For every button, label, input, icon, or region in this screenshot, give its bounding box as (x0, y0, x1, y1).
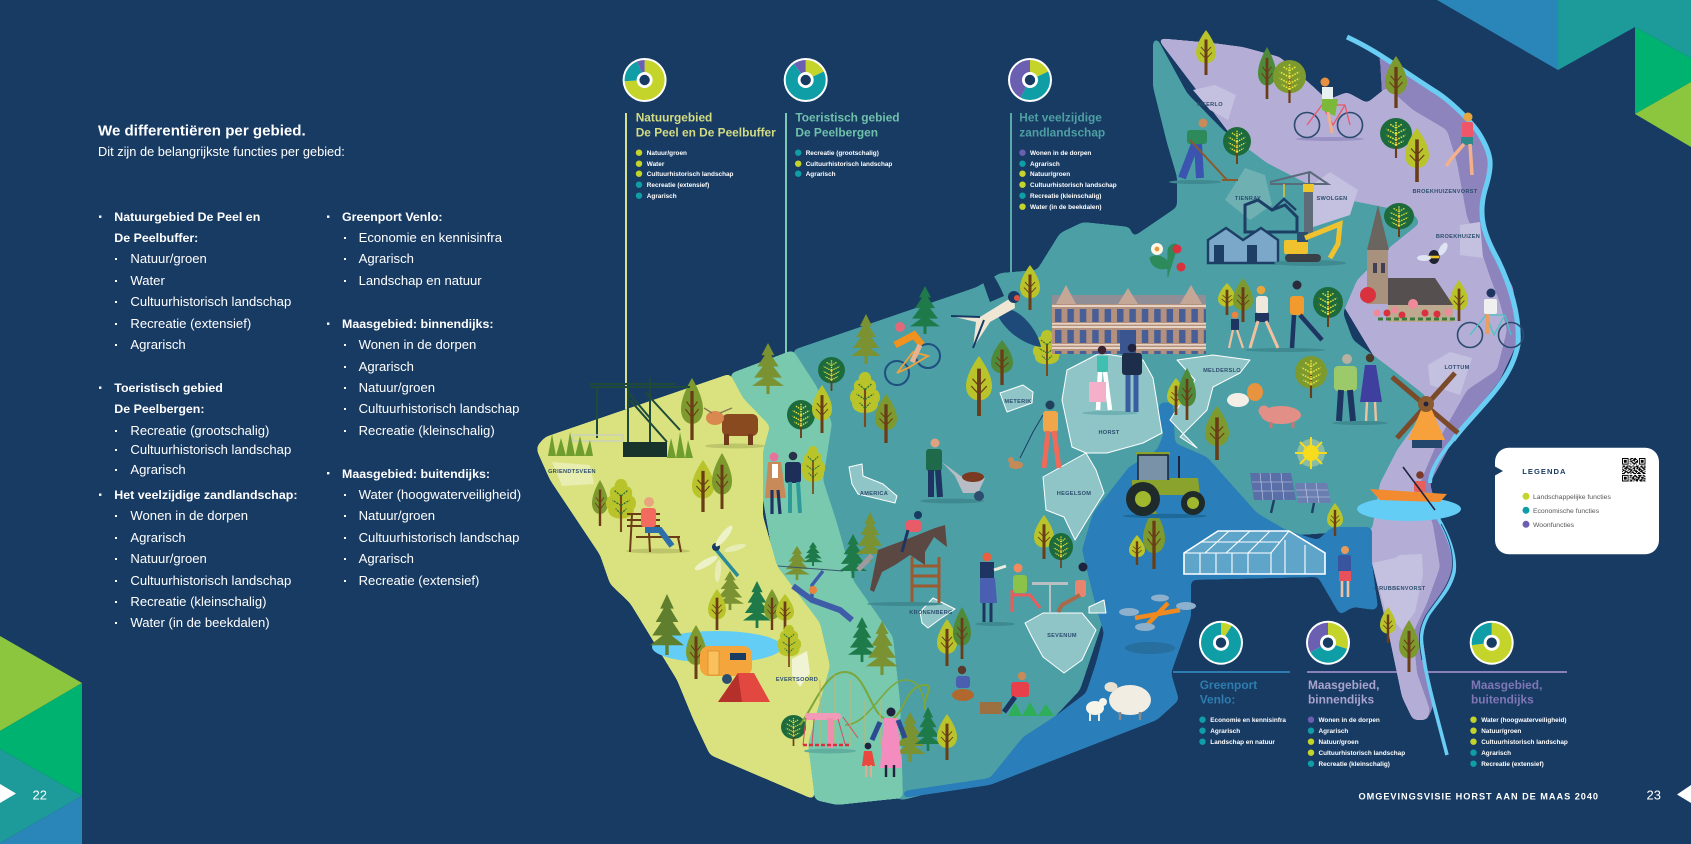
leader line: De Peelbergen (785, 113, 787, 353)
lake (652, 631, 782, 663)
text block: function list column 1: Recreatie (kleinschalig) (130, 594, 266, 609)
village: Hegelsom (1043, 453, 1104, 540)
village: Broekhuizen (1460, 222, 1483, 258)
river Maas (1347, 37, 1518, 755)
village: Tienray (1225, 168, 1272, 220)
icon: windmill (1392, 373, 1458, 448)
map labels: AMERICA (860, 491, 888, 497)
icon: swallow (951, 253, 1041, 348)
text block: function list column 1: Agrarisch (130, 462, 186, 477)
icon: gardeners with crate (952, 666, 1054, 716)
region: teal sand landscape (793, 38, 1427, 800)
icon: strawberry flower (1150, 243, 1186, 277)
donut chart (784, 58, 828, 102)
region: light teal Peelbergen (730, 350, 903, 805)
icon: racing cyclist (885, 322, 940, 385)
map labels: HORST (1098, 430, 1120, 436)
footer right with page number (1358, 785, 1691, 803)
region: dark lilac floodplain (1347, 37, 1520, 720)
icon: sheep and lamb (1086, 682, 1151, 721)
panel: Maasgebied buitendijks: buitendijks (1471, 692, 1534, 706)
village: Swolgen (1305, 172, 1358, 228)
text block: function list column 2: Greenport Venlo: (342, 210, 443, 224)
map: village shapes (849, 353, 1250, 673)
map labels: LOTTUM (1444, 365, 1470, 371)
map labels: METERIK (1004, 399, 1032, 405)
text block: function list column 1: Cultuurhistorisch landschap (130, 573, 291, 588)
panel: Maasgebied binnendijks: binnendijks (1308, 692, 1374, 706)
text block: function list column 2: Agrarisch (359, 359, 414, 374)
map: landscape regions (537, 37, 1520, 805)
text block: function list column 2: Agrarisch (359, 251, 414, 266)
text block: function list column 1: Agrarisch (130, 337, 186, 352)
map labels: HEGELSOM (1057, 491, 1091, 497)
icon: family walking (1229, 280, 1325, 352)
panel: legend card: Landschappelijke functies (1533, 494, 1611, 501)
text block: function list column 1: Cultuurhistorisch landschap (130, 442, 291, 457)
text block: function list column 2 (327, 210, 521, 588)
intro heading: Dit zijn de belangrijkste functies per gebied: (98, 144, 345, 159)
text block: function list column 1: Agrarisch (130, 530, 186, 545)
village: Meerlo (1193, 85, 1236, 120)
leader line: Greenport (1173, 671, 1290, 673)
icon: zipline rider (778, 566, 852, 620)
trees: north and east (1020, 30, 1468, 672)
donut chart (623, 58, 667, 102)
panel: Het veelzijdige zandlandschap: Recreatie (kleinschalig) (1030, 193, 1101, 200)
text block: function list column 1: Recreatie (extensief) (130, 316, 251, 331)
panel: Maasgebied buitendijks: Recreatie (extensief) (1481, 761, 1544, 768)
panel: Greenport Venlo: Economie en kennisinfra (1210, 717, 1286, 724)
icon: woman on bicycle (1294, 78, 1364, 141)
panel: Natuurgebied De Peel (623, 58, 776, 200)
text block: function list column 2: Agrarisch (359, 551, 414, 566)
map labels: TIENRAY (1235, 196, 1261, 202)
panel: legend card: LEGENDA (1522, 467, 1566, 476)
map labels: MEERLO (1197, 102, 1223, 108)
intro heading (98, 122, 345, 159)
icon: waiter and terrace (975, 552, 1088, 626)
village: Lottum (1428, 352, 1472, 395)
panel: Het veelzijdige zandlandschap: Cultuurhistorisch landschap (1030, 182, 1117, 189)
village: small hamlet (1089, 600, 1106, 613)
village: Horst (1062, 353, 1162, 453)
icon: historic building (1052, 285, 1206, 354)
donut chart (1306, 621, 1350, 665)
icon: caravan and tent (700, 646, 770, 702)
panel: Het veelzijdige zandlandschap (1008, 58, 1117, 211)
page number left: 22 (32, 788, 47, 802)
panel: Maasgebied binnendijks: Agrarisch (1318, 728, 1348, 735)
region: yellow-green Peel (537, 374, 830, 800)
text block: function list column 1: Toeristisch gebied (114, 381, 223, 395)
icon: new houses (1208, 199, 1297, 263)
donut chart (1470, 621, 1514, 665)
panel: Maasgebied buitendijks: Maasgebied, (1471, 678, 1542, 692)
icon: runner (1446, 112, 1473, 175)
icon: elderly couple (1332, 354, 1388, 425)
panel: Toeristisch gebied (784, 58, 900, 178)
panel: Maasgebied binnendijks: Natuur/groen (1318, 739, 1359, 746)
village: Grubbenvorst (1372, 554, 1423, 630)
panel: legend card (1495, 448, 1659, 554)
icon: crane (1270, 172, 1328, 233)
icon: kid with ice cream (1338, 546, 1351, 597)
text block: function list column 2: Maasgebied: binnendijks: (342, 317, 493, 331)
village: Kronenberg (920, 598, 955, 628)
trees: Peel and Peelbergen (592, 286, 1013, 762)
map labels: SWOLGEN (1316, 196, 1348, 202)
icon: chickens and pig (1227, 383, 1301, 428)
icon: QR code (1622, 458, 1646, 482)
panel: Greenport Venlo (1199, 621, 1286, 746)
map: pale villages on lilac (552, 85, 1483, 687)
icon: solar panels (1250, 473, 1331, 513)
text block: function list column 1: De Peelbuffer: (114, 231, 198, 245)
panel: Het veelzijdige zandlandschap: Het veelzijdige (1019, 110, 1102, 124)
panel: Natuurgebied De Peel: Natuur/groen (647, 150, 687, 157)
text block: function list column 2: Cultuurhistorisch landschap (359, 401, 519, 416)
text block: function list column 1: De Peelbergen: (114, 402, 205, 416)
map labels: BROEKHUIZEN (1436, 234, 1480, 240)
text block: function list column 2: Cultuurhistorisch landschap (359, 530, 519, 545)
leader line: zandlandschap (1010, 113, 1012, 281)
panel: Greenport Venlo: Agrarisch (1210, 728, 1240, 735)
text block: function list column 1: Water (in de beekdalen) (130, 615, 270, 630)
icon: gardener with wheelbarrow (920, 438, 985, 503)
map labels: GRUBBENVORST (1374, 586, 1426, 592)
intro heading: We differentiëren per gebied. (98, 122, 306, 140)
text block: function list column 1: Natuur/groen (130, 251, 207, 266)
map labels: KRONENBERG (909, 610, 953, 616)
text block: function list column 2: Landschap en natuur (359, 273, 482, 288)
icon: roller coaster and swing ride (800, 672, 929, 754)
text block: function list column 1: Cultuurhistorisch landschap (130, 294, 291, 309)
panel: Greenport Venlo: Venlo: (1200, 692, 1235, 706)
panel: Natuurgebied De Peel: Cultuurhistorisch landschap (647, 171, 734, 178)
text block: function list column 1: Recreatie (grootschalig) (130, 423, 269, 438)
panel: Natuurgebied De Peel: Agrarisch (647, 193, 677, 200)
text block: function list column 2: Water (hoogwaterveiligheid) (359, 487, 521, 502)
panel: legend card: Woonfuncties (1533, 522, 1575, 529)
panel: Maasgebied binnendijks: Wonen in de dorpen (1318, 717, 1380, 724)
panel: Toeristisch gebied: Toeristisch gebied (795, 110, 900, 124)
icon: shopping couple (1082, 344, 1142, 415)
panel: Het veelzijdige zandlandschap: Water (in de beekdalen) (1030, 204, 1102, 211)
icon: man on bicycle (1458, 288, 1524, 348)
panel: Natuurgebied De Peel: De Peel en De Peelbuffer (636, 126, 776, 140)
icon: dragonfly (693, 524, 746, 582)
map labels: GRIENDTSVEEN (548, 469, 596, 475)
map labels: SEVENUM (1047, 633, 1077, 639)
icon: couple with phone (765, 452, 801, 514)
footer right with page number: OMGEVINGSVISIE HORST AAN DE MAAS 2040 (1358, 792, 1599, 802)
panel: Maasgebied binnendijks: Maasgebied, (1308, 678, 1379, 692)
leader line: Maasgebied (1307, 671, 1567, 673)
village: Sevenum (1025, 613, 1096, 673)
icon: drone (1119, 594, 1196, 654)
icon: kayaker (1357, 467, 1461, 521)
panel: Toeristisch gebied: Cultuurhistorisch landschap (806, 161, 892, 168)
map labels (548, 102, 1480, 683)
icon: sun (1295, 437, 1327, 469)
icon: church with roses (1360, 205, 1455, 322)
panel: Toeristisch gebied: Agrarisch (806, 171, 836, 178)
leader line: De Peel (625, 113, 627, 409)
icon: mother and child (862, 708, 905, 777)
icon: excavator (1274, 224, 1346, 266)
text block: function list column 1: Natuurgebied De Peel en (114, 210, 260, 224)
text block: function list column 1: Het veelzijdige zandlandschap: (114, 488, 297, 502)
village: Evertsoord (792, 651, 810, 687)
donut chart (1199, 621, 1243, 665)
village: Griendtsveen (552, 462, 594, 486)
panel: legend card: Economische functies (1533, 508, 1600, 515)
donut chart (1008, 58, 1052, 102)
text block: function list column 2: Recreatie (kleinschalig) (359, 423, 495, 438)
map labels: BROEKHUIZENVORST (1412, 189, 1478, 195)
panel: Toeristisch gebied: Recreatie (grootschalig) (806, 150, 879, 157)
panel: Maasgebied buitendijks: Agrarisch (1481, 750, 1511, 757)
panel: Het veelzijdige zandlandschap: Natuur/groen (1030, 171, 1070, 178)
village: Meterik (1000, 385, 1033, 412)
icon: greenhouse (1184, 531, 1325, 574)
panel: Maasgebied buitendijks: Water (hoogwaterveiligheid) (1481, 717, 1567, 724)
panel: Maasgebied binnendijks: Cultuurhistorisch landschap (1318, 750, 1405, 757)
icon: farmer with rake (1169, 118, 1238, 184)
region: blue greenport water (903, 402, 1378, 798)
panel: Natuurgebied De Peel: Water (647, 161, 665, 168)
panel: Toeristisch gebied: De Peelbergen (795, 126, 878, 140)
panel: Maasgebied buitendijks: Cultuurhistorisch landschap (1481, 739, 1568, 746)
text block: function list column 2: Economie en kennisinfra (359, 230, 503, 245)
text block: function list column 1 (99, 210, 297, 630)
panel: Het veelzijdige zandlandschap: zandlandschap (1019, 126, 1105, 140)
panel: Natuurgebied De Peel: Recreatie (extensief) (647, 182, 709, 189)
icon: bumblebee (1417, 241, 1450, 264)
panel: Maasgebied binnendijks: Recreatie (kleinschalig) (1318, 761, 1390, 768)
text block: function list column 1: Natuur/groen (130, 551, 207, 566)
icon: Highland cow (704, 408, 765, 448)
text block: function list column 2: Wonen in de dorpen (359, 337, 476, 352)
panel: Natuurgebied De Peel: Natuurgebied (636, 110, 712, 124)
village: Melderslo (1170, 355, 1250, 448)
panel: Het veelzijdige zandlandschap: Agrarisch (1030, 161, 1060, 168)
village: America (849, 464, 897, 503)
icon: person on bench (626, 497, 690, 554)
panel: Het veelzijdige zandlandschap: Wonen in de dorpen (1030, 150, 1091, 157)
footer right with page number: 23 (1646, 788, 1661, 802)
text block: function list column 2: Recreatie (extensief) (359, 573, 479, 588)
map labels: EVERTSOORD (776, 677, 818, 683)
map labels: MELDERSLO (1203, 368, 1241, 374)
icon: horse rider and jump (858, 511, 947, 606)
icon: lift bridge (548, 378, 693, 458)
text block: function list column 2: Natuur/groen (359, 508, 435, 523)
panel: Maasgebied binnendijks (1306, 621, 1405, 768)
page number left (0, 784, 47, 803)
icon: man walking dog (1008, 400, 1059, 469)
corner decoration: bottom left triangles (0, 636, 82, 844)
panel: Greenport Venlo: Landschap en natuur (1210, 739, 1275, 746)
panel: Maasgebied buitendijks (1470, 621, 1568, 768)
icon: tractor (1123, 452, 1207, 518)
text block: function list column 2: Maasgebied: buitendijks: (342, 467, 490, 481)
text block: function list column 1: Wonen in de dorpen (130, 508, 248, 523)
text block: function list column 2: Natuur/groen (359, 380, 435, 395)
panel: Maasgebied buitendijks: Natuur/groen (1481, 728, 1521, 735)
region: light lilac (1157, 38, 1507, 720)
corner decoration: top right triangles (1437, 0, 1691, 147)
text block: function list column 1: Water (130, 273, 165, 288)
panel: Greenport Venlo: Greenport (1200, 678, 1257, 692)
